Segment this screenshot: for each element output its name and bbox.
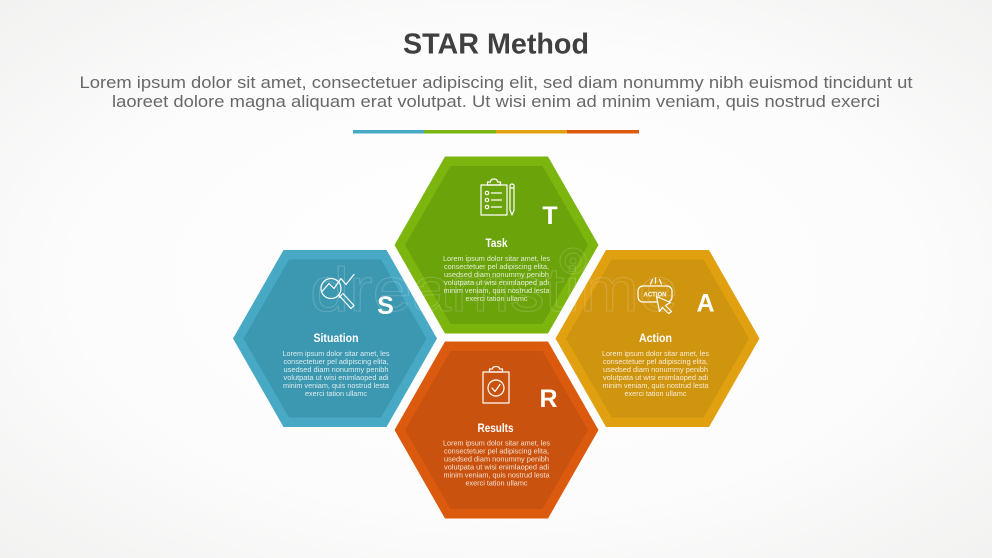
description text: consectetuer pel adipiscing elita, [284,359,389,366]
description text: exerci tation ullamc [305,391,368,398]
panel: Action [556,250,760,427]
description text: usedsed diam nonummy penibh [284,367,389,374]
icon: magnifier over chart [321,274,354,308]
description text: Lorem ipsum dolor sitar amet, les [443,440,551,448]
icon: action button with cursor [638,278,672,314]
description text: minim veniam, quis nostrud lesta [444,288,550,295]
letter A: A [696,290,715,318]
description text: volutpata ut wisi enimlaoped adi [444,280,549,287]
letter R: R [539,385,558,413]
subtitle text [80,73,913,111]
description text: exerci tation ullamc [466,480,528,488]
description text [443,440,551,488]
panel: Results [394,342,598,518]
description text [282,351,390,398]
description text: volutpata ut wisi enimlaoped adi [284,375,389,382]
description text: usedsed diam nonummy penibh [444,272,549,279]
description text: exerci tation ullamc [624,391,687,398]
description text: consectetuer pel adipiscing elita, [444,264,549,271]
description text: usedsed diam nonummy penibh [603,367,708,374]
description text: Lorem ipsum dolor sitar amet, les [602,351,710,358]
description text [602,351,710,398]
icon: action button with cursor: ACTION [644,292,666,298]
description text: Lorem ipsum dolor sitar amet, les [443,256,551,263]
letter T: T [542,202,558,230]
description text: minim veniam, quis nostrud lesta [602,383,709,390]
description text: minim veniam, quis nostrud lesta [283,383,389,390]
description text: Lorem ipsum dolor sitar amet, les [282,351,390,358]
watermark: dreamstime [310,256,678,325]
description text [443,256,551,303]
subtitle text: Lorem ipsum dolor sit amet, consectetuer adipiscing elit, sed diam nonummy nibh euismod tincidunt ut [80,73,913,92]
description text: usedsed diam nonummy penibh [444,456,549,464]
heading: Task: Task [486,238,508,250]
description text: volutpata ut wisi enimlaoped adi [603,375,708,382]
icon: checklist clipboard and pencil [481,179,514,215]
title: STAR Method [403,28,589,60]
heading: Situation: Situation [314,333,358,345]
description text: volutpata ut wisi enimlaoped adi [444,464,549,472]
icon: clipboard with check [483,366,509,403]
description text: consectetuer pel adipiscing elita, [444,448,549,456]
description text: exerci tation ullamc [466,296,528,303]
panel: Task [394,156,598,334]
heading: Action: Action [639,333,672,345]
colour divider bar [353,130,639,134]
panel: Situation [233,250,437,427]
description text: consectetuer pel adipiscing elita, [603,359,708,366]
subtitle text: laoreet dolore magna aliquam erat volutpat. Ut wisi enim ad minim veniam, quis nostrud exerci [112,92,880,111]
heading: Results: Results [478,423,514,435]
description text: minim veniam, quis nostrud lesta [444,472,550,480]
letter S: S [377,292,394,320]
